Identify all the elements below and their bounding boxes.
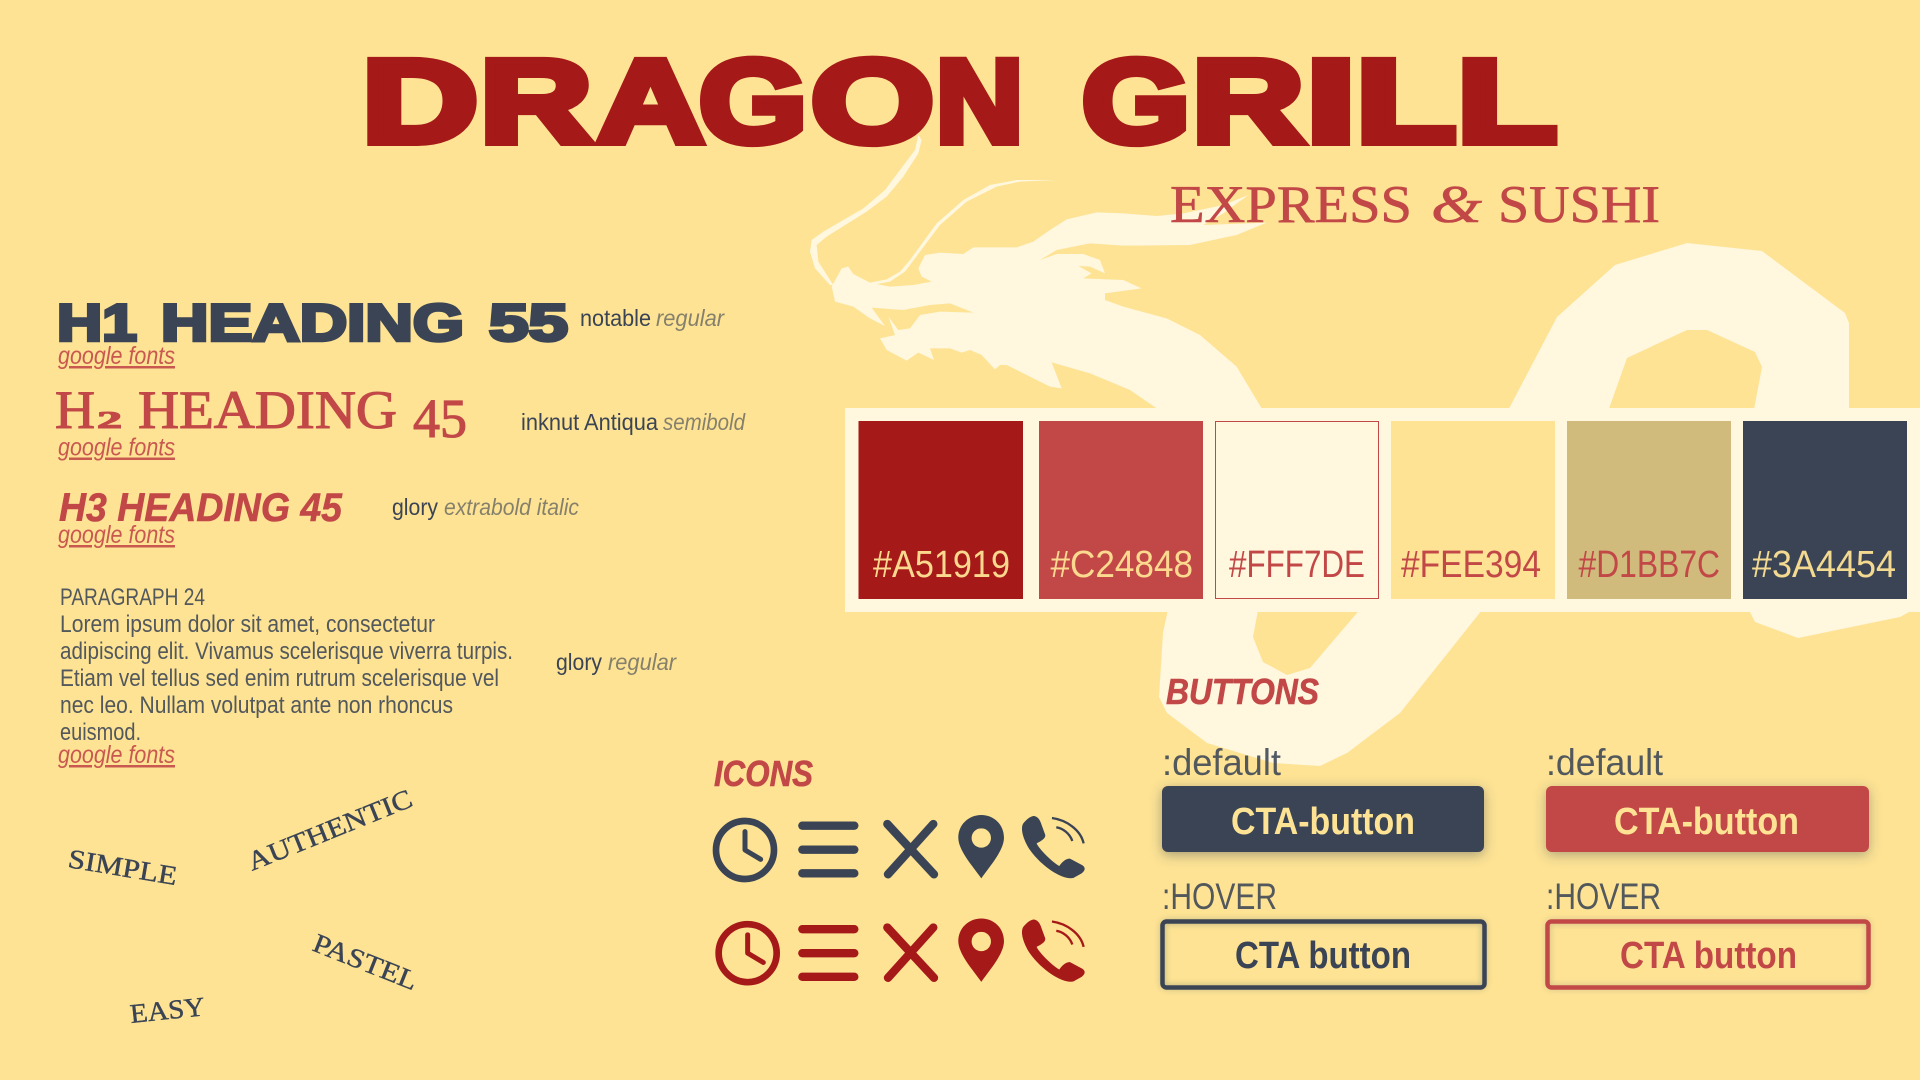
paragraph font name: regular — [608, 649, 677, 675]
icon: location pin — [958, 918, 1004, 982]
state label: :HOVER — [1546, 876, 1661, 917]
h2 heading: 45 — [413, 388, 467, 449]
h1 font name: regular — [656, 305, 725, 331]
dragon silhouette — [810, 135, 1920, 766]
title: R — [1192, 36, 1304, 168]
title: N — [936, 36, 1023, 168]
subtitle: SUSHI — [1498, 176, 1660, 234]
title: A — [597, 36, 704, 168]
title: G — [699, 36, 807, 168]
paragraph text: Etiam vel tellus sed enim rutrum scelerisque vel — [60, 665, 499, 692]
icon: location pin — [958, 815, 1004, 878]
h2 heading: H — [55, 380, 95, 440]
swatch fff7de: #FFF7DE — [1229, 544, 1365, 586]
buttons hover navy — [1162, 876, 1484, 988]
state label: :default — [1546, 742, 1664, 783]
keywords — [66, 783, 422, 1029]
swatch 3a4454: #3A4454 — [1752, 544, 1896, 586]
paragraph font name: glory — [556, 649, 602, 675]
title: I — [1306, 36, 1356, 168]
buttons heading: BUTTONS — [1166, 671, 1319, 712]
title: D — [362, 36, 478, 168]
title: G — [1082, 36, 1190, 168]
subtitle: & — [1431, 176, 1483, 234]
keyword: simple: SIMPLE — [66, 843, 179, 891]
panel: colour palette — [845, 408, 1920, 612]
swatch fee394: #FEE394 — [1401, 544, 1541, 586]
icon: menu — [802, 929, 854, 977]
paragraph specimen — [58, 584, 677, 769]
paragraph text: Lorem ipsum dolor sit amet, consectetur — [60, 611, 435, 638]
button: CTA-button — [1614, 801, 1799, 843]
buttons default red — [1546, 742, 1869, 855]
h2 font name: semibold — [663, 409, 746, 435]
icons row navy — [716, 815, 1085, 879]
state label: :HOVER — [1162, 876, 1277, 917]
title: O — [811, 36, 934, 168]
button: CTA-button — [1231, 801, 1415, 843]
subtitle: EXPRESS — [1170, 176, 1412, 234]
button — [1548, 922, 1868, 988]
h1 font name: notable — [580, 305, 651, 331]
h2 link: google fonts — [58, 434, 175, 462]
icon: close — [887, 824, 934, 874]
h3 heading: H3 HEADING 45 — [59, 486, 343, 530]
keyword: pastel: PASTEL — [309, 928, 422, 996]
buttons hover red — [1546, 876, 1868, 988]
button: CTA button — [1620, 935, 1797, 977]
icon: clock — [719, 924, 777, 982]
paragraph text: nec leo. Nullam volutpat ante non rhoncus — [60, 692, 453, 719]
icon: menu — [802, 826, 854, 873]
h3 font name: glory — [392, 494, 438, 520]
keyword: easy: EASY — [128, 991, 206, 1029]
swatch fee394 — [1391, 421, 1555, 599]
h1 heading: 55 — [489, 294, 568, 352]
h1 link: google fonts — [58, 342, 175, 370]
paragraph text: euismod. — [60, 719, 141, 746]
swatch fff7de — [1216, 422, 1378, 598]
icon: clock — [716, 821, 774, 879]
button — [1162, 786, 1484, 852]
button — [1162, 922, 1484, 988]
title: L — [1457, 36, 1557, 168]
icon: phone — [1022, 919, 1085, 982]
paragraph text: PARAGRAPH 24 — [60, 584, 205, 611]
swatch a51919: #A51919 — [873, 544, 1010, 586]
h2 heading: HEADING — [138, 380, 397, 440]
state label: :default — [1162, 742, 1282, 783]
icon: phone — [1022, 816, 1085, 878]
swatch d1bb7c: #D1BB7C — [1578, 544, 1720, 586]
icon: close — [887, 927, 934, 978]
h3 font name: extrabold italic — [444, 494, 579, 520]
h1 specimen — [57, 294, 725, 370]
title: R — [480, 36, 592, 168]
h3 specimen — [58, 486, 579, 549]
title: L — [1356, 36, 1456, 168]
button — [1546, 786, 1869, 852]
h2 font name: inknut Antiqua — [521, 409, 658, 435]
icons row red — [719, 918, 1085, 982]
h1 heading: H1 — [57, 294, 137, 352]
paragraph text: adipiscing elit. Vivamus scelerisque viverra turpis. — [60, 638, 513, 665]
swatch 3a4454 — [1743, 421, 1907, 599]
h3 link: google fonts — [58, 521, 175, 549]
icons heading: ICONS — [714, 753, 813, 794]
keyword: authentic: AUTHENTIC — [243, 783, 417, 877]
swatch a51919 — [858, 421, 1023, 599]
paragraph link: google fonts — [58, 741, 175, 769]
buttons default navy — [1162, 742, 1484, 855]
h2 specimen — [55, 380, 746, 462]
swatch c24848 — [1039, 421, 1203, 599]
swatch d1bb7c — [1567, 421, 1731, 599]
button: CTA button — [1235, 935, 1411, 977]
h2 heading: 2 — [97, 408, 122, 434]
h1 heading: HEADING — [161, 294, 464, 352]
swatch c24848: #C24848 — [1050, 544, 1193, 586]
